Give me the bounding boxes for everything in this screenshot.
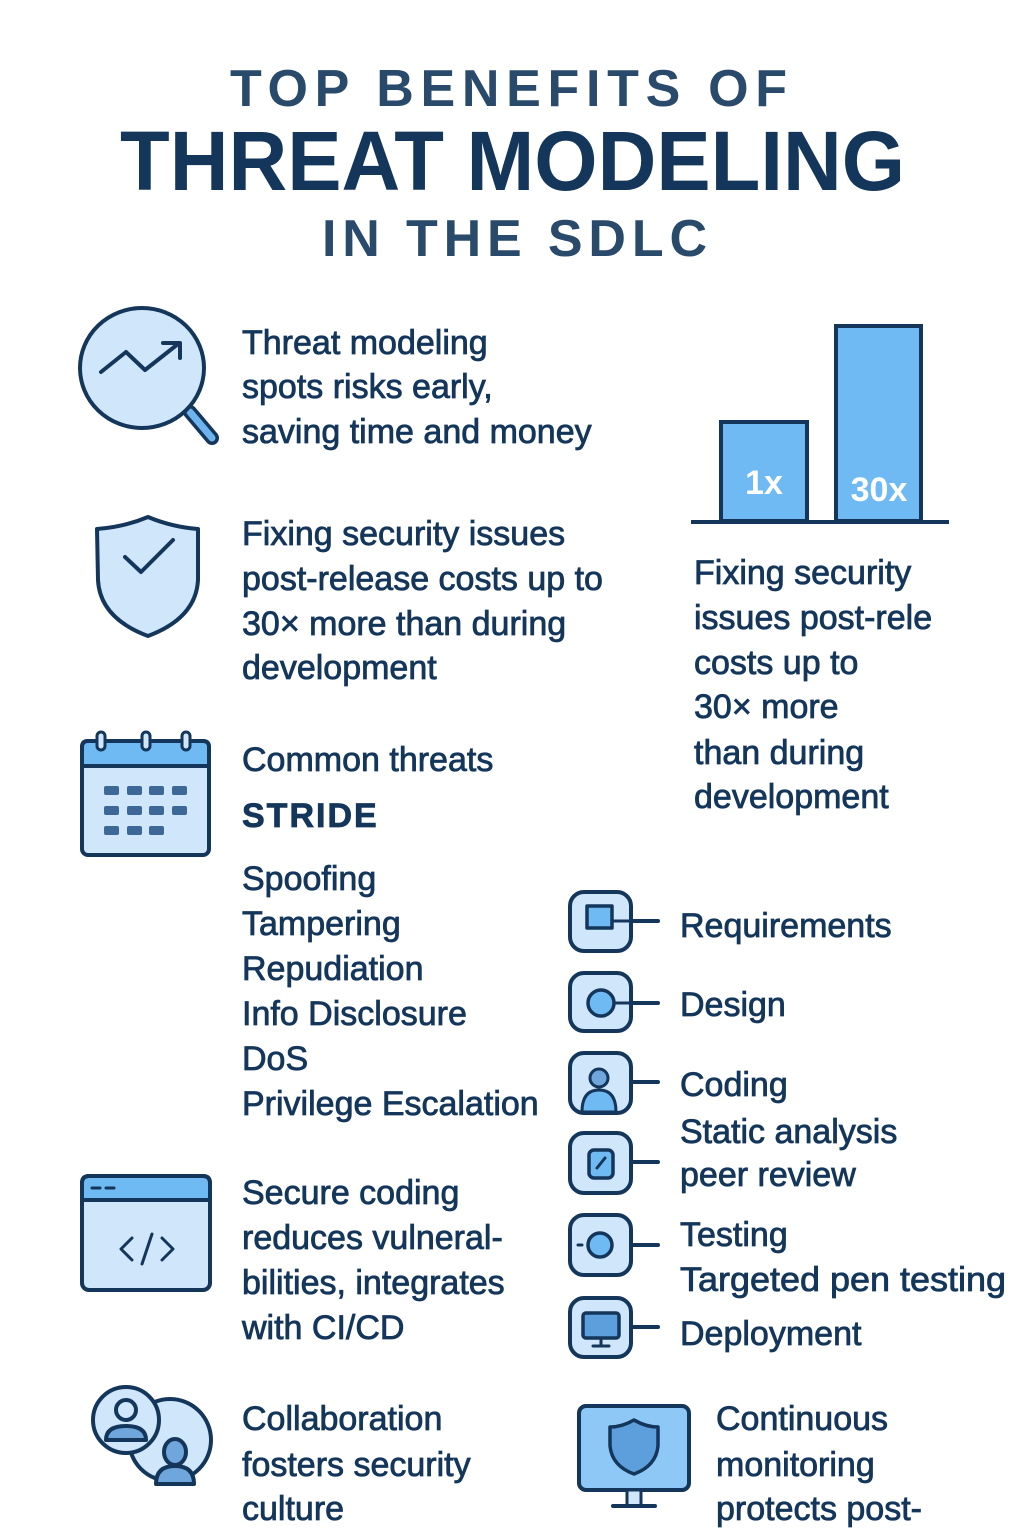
text: common threats STRIDE: STRIDE: [242, 797, 379, 835]
title: THREAT MODELING: [120, 114, 905, 208]
text: SDLC stage labels: Testing: [680, 1216, 788, 1254]
text: right fixing costs: development: [694, 778, 889, 816]
icon: magnifier with trend: [80, 308, 212, 438]
icon: testing: [570, 1215, 658, 1275]
text: continuous monitoring: Continuous: [716, 1400, 888, 1438]
text: right fixing costs: 30× more: [694, 688, 839, 726]
icon: shield check: [97, 517, 198, 636]
text: collaboration: Collaboration: [242, 1400, 442, 1438]
text: continuous monitoring: protects post-: [716, 1490, 922, 1528]
icon: static analysis: [570, 1133, 658, 1193]
text: common threats STRIDE: Common threats: [242, 741, 493, 779]
text: secure coding: with CI/CD: [241, 1309, 404, 1347]
icon: collaboration: [93, 1387, 211, 1484]
text: SDLC stage labels: Coding: [680, 1066, 788, 1104]
text: spots risks early: saving time and money: [242, 413, 592, 451]
text: fixing costs: Fixing security issues: [242, 515, 565, 553]
title: TOP BENEFITS OF: [230, 60, 787, 118]
text: right fixing costs: than during: [694, 734, 864, 772]
bar chart: 30x: [851, 471, 907, 509]
text: spots risks early: spots risks early,: [242, 368, 493, 406]
bar chart: 1x: [745, 464, 783, 502]
text: SDLC stage labels: Deployment: [680, 1315, 862, 1353]
text: common threats STRIDE: DoS: [242, 1040, 308, 1078]
text: SDLC stage labels: Static analysis: [680, 1113, 897, 1151]
icon: monitor shield: [579, 1406, 689, 1506]
icon: calendar: [82, 732, 209, 855]
text: SDLC stage labels: peer review: [680, 1156, 856, 1194]
title: [120, 60, 905, 268]
bar chart: [691, 326, 949, 522]
text: common threats STRIDE: Repudiation: [242, 950, 423, 988]
text: SDLC stage labels: Targeted pen testing: [680, 1261, 1006, 1299]
text: right fixing costs: issues post-rele: [694, 599, 932, 637]
text: right fixing costs: Fixing security: [694, 554, 911, 592]
text: SDLC stage labels: Requirements: [680, 907, 892, 945]
timeline: SDLC stages: [570, 892, 658, 1357]
text: fixing costs: post-release costs up to: [242, 560, 603, 598]
text: secure coding: bilities, integrates: [242, 1264, 505, 1302]
text: secure coding: Secure coding: [242, 1174, 459, 1212]
text: common threats STRIDE: Info Disclosure: [242, 995, 467, 1033]
text: common threats STRIDE: Privilege Escalation: [242, 1085, 539, 1123]
icon: code window: [82, 1176, 210, 1290]
text: SDLC stage labels: Design: [680, 986, 786, 1024]
icon: requirements: [570, 892, 658, 951]
text: right fixing costs: costs up to: [694, 644, 858, 682]
text: fixing costs: development: [242, 649, 437, 687]
icon: coding: [570, 1053, 658, 1113]
text: common threats STRIDE: Spoofing: [242, 860, 376, 898]
text: continuous monitoring: monitoring: [716, 1446, 875, 1484]
text: collaboration: fosters security: [242, 1446, 471, 1484]
text: common threats STRIDE: Tampering: [242, 905, 401, 943]
icon: deployment: [570, 1298, 658, 1357]
icon: design: [570, 973, 658, 1031]
text: collaboration: culture: [242, 1490, 344, 1528]
text: fixing costs: 30× more than during: [242, 605, 566, 643]
title: IN THE SDLC: [322, 210, 707, 268]
text: spots risks early: Threat modeling: [242, 324, 488, 362]
text: secure coding: reduces vulneral-: [242, 1219, 503, 1257]
